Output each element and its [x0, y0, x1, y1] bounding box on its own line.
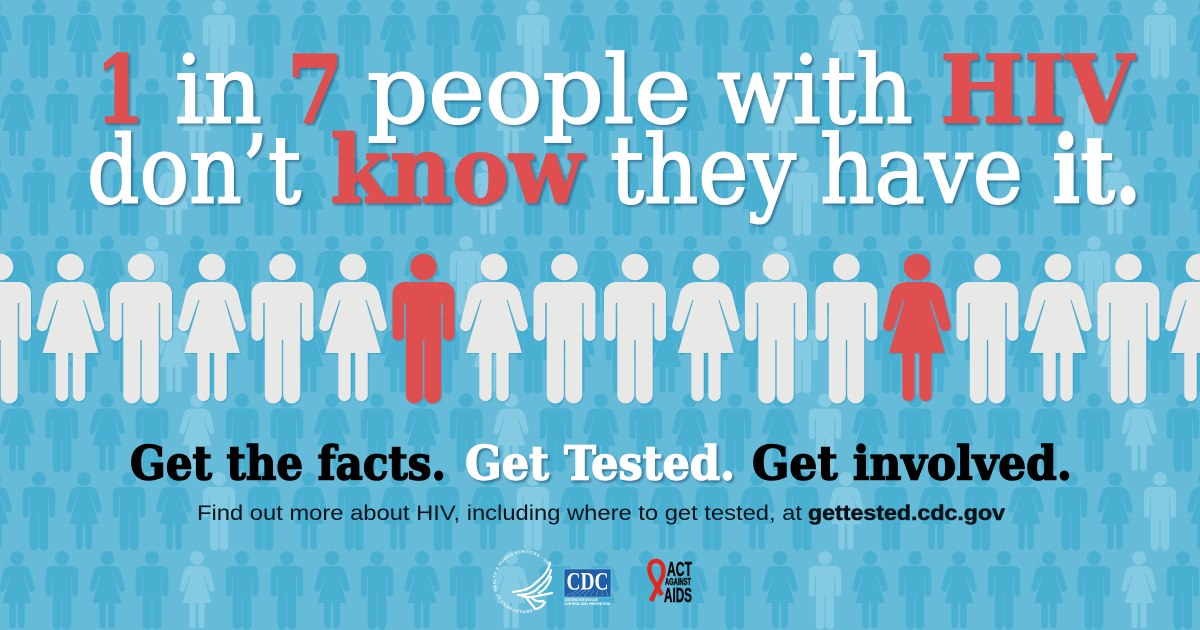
- headline: people: [367, 36, 691, 146]
- headline: HIV: [940, 36, 1136, 146]
- headline: know: [330, 116, 585, 226]
- headline: 7: [287, 36, 343, 146]
- logo: Act Against AIDS: AGAINST: [665, 576, 691, 588]
- logo: Act Against AIDS: [649, 559, 692, 607]
- tagline: Get involved.: [752, 436, 1072, 492]
- tagline: Get the facts.: [130, 436, 446, 492]
- headline: don’t: [87, 116, 301, 226]
- call to action text: [197, 502, 1005, 525]
- headline: 1: [96, 36, 144, 146]
- call to action text: Find out more about HIV, including where to get tested, at: [197, 502, 802, 525]
- logo: CDC: CONTROL AND PREVENTION: [564, 602, 611, 606]
- tagline: [130, 436, 1072, 492]
- row of people with two highlighted in red: [0, 254, 1200, 404]
- headline: it.: [1052, 116, 1141, 226]
- logo: CDC: CENTERS FOR DISEASE: [564, 598, 598, 602]
- logo: HHS eagle seal: DEPARTMENT OF HEALTH & HUMAN SERVICES · USA: [492, 550, 549, 614]
- logo: Act Against AIDS: ACT: [667, 559, 692, 581]
- headline: [87, 36, 1141, 226]
- headline: with: [717, 36, 913, 146]
- headline: have: [820, 116, 1023, 226]
- call to action text: gettested.cdc.gov: [808, 502, 1005, 525]
- headline: in: [175, 36, 262, 146]
- logo: HHS eagle seal: [492, 550, 554, 614]
- headline: they: [610, 116, 796, 226]
- logo: CDC: CDC: [566, 568, 608, 596]
- tagline: Get Tested.: [465, 436, 735, 492]
- logo: Act Against AIDS: AIDS: [664, 585, 692, 607]
- logo: CDC: [564, 568, 611, 606]
